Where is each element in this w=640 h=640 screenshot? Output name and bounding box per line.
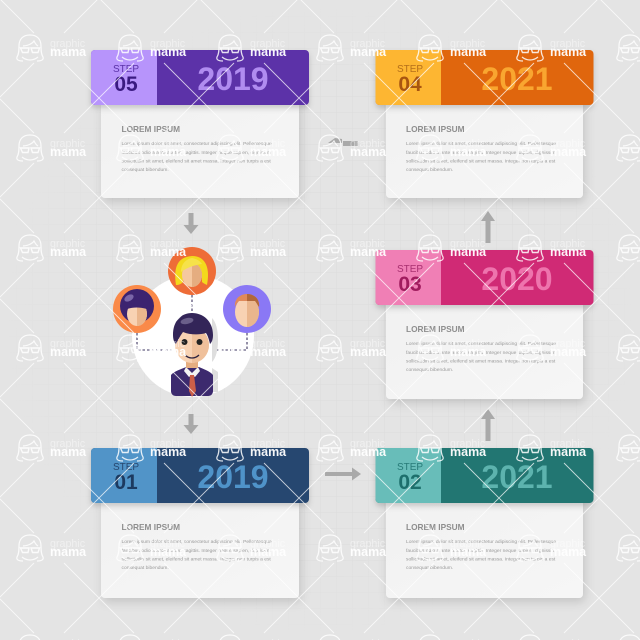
header band (376, 448, 594, 503)
body text (122, 539, 272, 571)
body text: sollicitudin sit amet, eleifend sit amet massa. Integer non turpis a est (122, 158, 271, 164)
panel: step 04 (376, 50, 594, 198)
body text: faucibus odio a ante auctor, sagittis. Integer neque sapien, dignissim (406, 350, 556, 356)
body text: faucibus odio a ante auctor, sagittis. Integer neque sapien, dignissim (406, 150, 556, 156)
heading: LOREM IPSUM (406, 522, 465, 532)
step label: STEP (397, 264, 423, 275)
heading: LOREM IPSUM (122, 522, 180, 532)
body text: faucibus odio a ante auctor, sagittis. Integer neque sapien, dignissim (406, 548, 556, 554)
card body (386, 498, 583, 598)
people illustration (113, 247, 271, 397)
header band (91, 50, 309, 105)
body text: Lorem ipsum dolor sit amet, consectetur adipiscing elit. Pellentesque (122, 141, 272, 147)
card body (101, 498, 299, 598)
icon: dark-haired woman (113, 285, 161, 333)
icon: central businessman (171, 313, 218, 397)
step label: STEP (113, 64, 139, 75)
body text (406, 141, 556, 173)
arrow: step 01 to step 02 (325, 468, 361, 480)
step number: 03 (398, 273, 422, 296)
year: 2021 (481, 459, 553, 495)
body text: consequat bibendum. (406, 167, 453, 173)
step label: STEP (397, 64, 423, 75)
body text: consequat bibendum. (122, 565, 169, 571)
panel: step 01 (91, 448, 309, 598)
body text: sollicitudin sit amet, eleifend sit amet massa. Integer non turpis a est (406, 556, 556, 562)
panel: step 03 (376, 250, 594, 399)
body text: consequat bibendum. (406, 367, 453, 373)
body text: Lorem ipsum dolor sit amet, consectetur adipiscing elit. Pellentesque (406, 141, 556, 147)
body text (406, 539, 556, 571)
heading: LOREM IPSUM (406, 324, 465, 334)
panel: step 05 (91, 50, 309, 198)
body text: faucibus odio a ante auctor, sagittis. Integer neque sapien, dignissim (122, 150, 271, 156)
step label: STEP (397, 462, 423, 473)
body text (122, 141, 272, 173)
body text: sollicitudin sit amet, eleifend sit amet massa. Integer non turpis a est (122, 556, 271, 562)
dashed connectors (137, 295, 247, 350)
step number: 05 (114, 73, 138, 96)
step label: STEP (113, 462, 139, 473)
year: 2019 (197, 61, 269, 97)
arrow: step 02 up to step 03 (481, 409, 495, 441)
icon: blonde woman (168, 247, 216, 295)
arrow: step 03 up to step 04 (481, 211, 495, 243)
body text: faucibus odio a ante auctor, sagittis. Integer neque sapien, dignissim (122, 548, 271, 554)
year: 2020 (481, 261, 553, 297)
card body (101, 100, 299, 198)
body text: consequat bibendum. (122, 167, 169, 173)
card body (386, 300, 583, 399)
step number: 02 (398, 471, 422, 494)
step number: 04 (398, 73, 422, 96)
header band (376, 250, 594, 305)
body text: consequat bibendum. (406, 565, 453, 571)
body text: sollicitudin sit amet, eleifend sit amet massa. Integer non turpis a est (406, 358, 556, 364)
icon: red-haired man (223, 285, 271, 333)
white circle backdrop (132, 275, 254, 397)
body text (406, 341, 556, 373)
body text: Lorem ipsum dolor sit amet, consectetur adipiscing elit. Pellentesque (122, 539, 272, 545)
card body (386, 100, 583, 198)
header band (91, 448, 309, 503)
arrow: 05 down from people (184, 213, 198, 234)
body text: Lorem ipsum dolor sit amet, consectetur adipiscing elit. Pellentesque (406, 539, 556, 545)
body text: sollicitudin sit amet, eleifend sit amet massa. Integer non turpis a est (406, 158, 556, 164)
arrow: faint step 05 to step 04 (328, 138, 358, 146)
panel: step 02 (376, 448, 594, 598)
body text: Lorem ipsum dolor sit amet, consectetur adipiscing elit. Pellentesque (406, 341, 556, 347)
header band (376, 50, 594, 105)
heading: LOREM IPSUM (406, 124, 465, 134)
arrow: people down to step 01 (184, 414, 198, 434)
year: 2019 (197, 459, 269, 495)
step number: 01 (114, 471, 138, 494)
heading: LOREM IPSUM (122, 124, 180, 134)
year: 2021 (481, 61, 553, 97)
